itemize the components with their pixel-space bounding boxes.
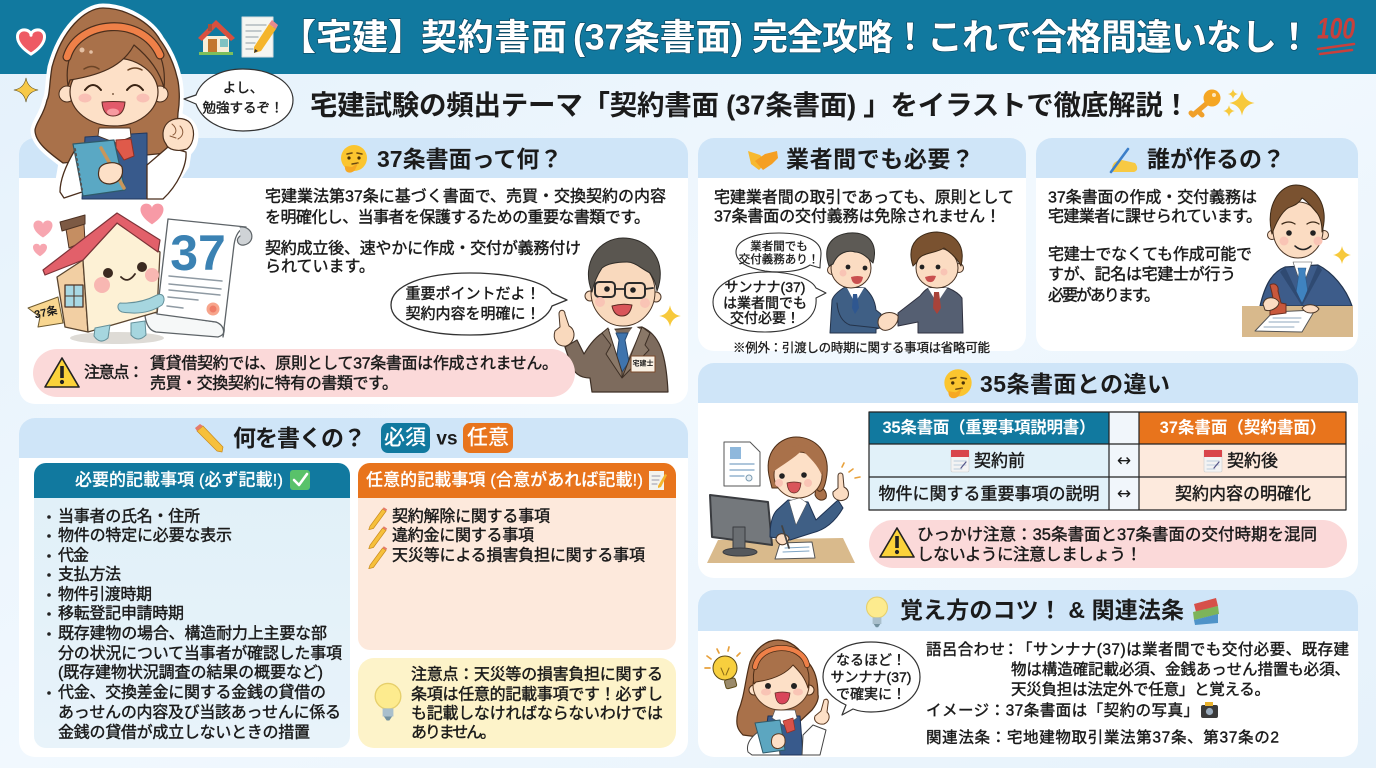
icon: thinking face (944, 369, 972, 398)
panel: who makes it: すが、記名は宅建士が行う (1048, 266, 1236, 284)
house walls (57, 260, 88, 332)
icon: sparkle (14, 78, 38, 102)
icon: bulb (375, 683, 401, 721)
text block: mnemonic: ： (1003, 642, 1019, 658)
list: optional: 契約解除に関する事項 (392, 508, 550, 526)
callout: caution (33, 349, 575, 397)
heading: difference: 35条書面との違い (980, 371, 1170, 397)
speech bubble: I see: サンナナ(37) (831, 669, 911, 685)
icon: thinking face (341, 145, 367, 173)
right sleeve and hand (802, 725, 826, 755)
text block: mnemonic (926, 640, 1350, 746)
comparison table: 35条書面（重要事項説明書） (882, 417, 1096, 437)
footnote: exception: ※例外：引渡しの時期に関する事項は省略可能 (733, 340, 990, 355)
header banner (0, 0, 1376, 74)
text block: mnemonic: 天災負担は法定外で任意」と覚える。 (1011, 680, 1270, 698)
column: mandatory items (34, 463, 350, 748)
icon: memo (649, 471, 667, 490)
speech bubble: I see: なるほど！ (836, 652, 906, 668)
list: optional: 天災等による損害負担に関する事項 (392, 546, 645, 564)
speech bubble: top: 業者間でも (750, 240, 808, 253)
icon: bulb (867, 597, 887, 627)
callout: trap warning (869, 520, 1347, 568)
title (280, 16, 1312, 58)
white sticker outline (35, 8, 194, 199)
list: mandatory: 金銭の貸借が成立しないときの措置 (58, 724, 310, 742)
text block: mnemonic: イメージ：37条書面は「契約の写真」 (926, 702, 1199, 720)
icon: handshake (748, 151, 778, 170)
panel: who makes it: 宅建士でなくても作成可能で (1048, 246, 1252, 264)
speech bubble: top (736, 233, 821, 272)
callout: caution: 賃貸借契約では、原則として37条書面は作成されません。 (150, 354, 558, 372)
face (749, 685, 759, 695)
list: mandatory: 移転登記申請時期 (58, 604, 184, 622)
column: optional items: 任意的記載事項 (合意があれば記載!) (366, 470, 643, 490)
text block: definition: られています。 (265, 258, 375, 276)
list: mandatory: 支払方法 (58, 566, 121, 584)
comparison table: 契約前 (974, 452, 1025, 470)
hair (737, 640, 818, 740)
callout: trap warning: しないように注意しましょう！ (917, 545, 1142, 564)
panel: business to business: 37条書面の交付義務は免除されません！ (714, 208, 1001, 226)
icon: heart (17, 30, 45, 54)
title: 契約書面 (421, 16, 567, 58)
speech bubble: bottom (713, 272, 826, 332)
callout: caution: 売買・交換契約に特有の書類です。 (150, 374, 398, 392)
list: mandatory: (既存建物状況調査の結果の概要など) (58, 664, 323, 682)
icon: sparkles (1223, 89, 1255, 117)
heading: b2b: 業者間でも必要？ (786, 146, 974, 172)
right businessman (898, 288, 963, 333)
scroll document: 37 (170, 225, 226, 281)
list: optional (369, 507, 645, 569)
character: teacher with glasses: 宅建士 (632, 358, 654, 368)
title: (37条書面) (573, 16, 743, 58)
panel: who makes it: 宅建業者に課せられています。 (1048, 208, 1262, 226)
column: mandatory items: 必要的記載事項 (必ず記載!) (75, 470, 283, 490)
icon: pencil (195, 424, 223, 452)
list: mandatory: あっせんの内容及び当該あっせんに係る (58, 704, 341, 722)
icon: 100: 100 (1317, 12, 1355, 46)
badge: required (381, 423, 430, 453)
illustration: house with scroll: 37条 (33, 303, 59, 321)
heading: what to write: 何を書くの？ (233, 425, 366, 451)
list: mandatory: 物件の特定に必要な表示 (58, 526, 232, 544)
comparison table: 契約後 (1227, 452, 1278, 470)
heading: tips: 覚え方のコツ！ & 関連法条 (900, 597, 1184, 623)
text block: mnemonic: 関連法条：宅地建物取引業法第37条、第37条の2 (926, 728, 1279, 746)
face details (85, 85, 143, 90)
title: 完全攻略！これで合格間違いなし！ (752, 16, 1312, 58)
right sleeve and fist (147, 147, 186, 199)
icon: camera (1201, 702, 1218, 718)
list: optional: 違約金に関する事項 (392, 526, 534, 544)
speech bubble: let's study (184, 69, 293, 131)
callout: note (358, 658, 676, 748)
speech bubble: teacher (391, 273, 567, 335)
column: optional items (358, 463, 676, 650)
heading: what is it: 37条書面って何？ (377, 146, 562, 172)
list: mandatory: 既存建物の場合、構造耐力上主要な部 (58, 624, 327, 642)
character: teacher with glasses (554, 238, 681, 392)
text block: mnemonic: 物は構造確記載必須、金銭あっせん措置も必須、 (1011, 660, 1350, 678)
callout: note: 条項は任意的記載事項です！必ずし (411, 686, 663, 704)
left sleeve, notebook, hand (747, 732, 780, 755)
badge: optional: 任意 (467, 426, 509, 450)
bangs (67, 24, 164, 88)
badge: required: 必須 (384, 426, 426, 450)
panel: difference from article 35 (698, 363, 1358, 578)
label: vs: vs (436, 428, 458, 450)
comparison table: ↔ (1117, 451, 1131, 471)
heading: who: 誰が作るの？ (1147, 146, 1285, 172)
list: mandatory: 当事者の氏名・住所 (58, 508, 200, 526)
list: mandatory: 分の状況について当事者が確認した事項 (58, 644, 342, 662)
speech bubble: let's study: 勉強するぞ！ (202, 100, 284, 116)
left sleeve and notebook (60, 150, 101, 198)
speech bubble: teacher: 重要ポイントだよ！ (405, 286, 541, 302)
comparison table: ↔ (1117, 484, 1131, 504)
callout: note: ありません。 (411, 724, 496, 742)
panel: memory tips (698, 590, 1358, 757)
icon: house (198, 20, 235, 55)
vest (763, 716, 803, 755)
speech bubble: bottom: は業者間でも (723, 295, 807, 311)
label: caution: 注意点： (84, 364, 144, 382)
character: girl student with notebook (35, 8, 194, 199)
icon: check (290, 470, 310, 490)
subtitle: 宅建試験の頻出テーマ「契約書面 (37条書面) 」をイラストで徹底解説！ (310, 90, 1190, 120)
callout: note: も記載しなければならないわけでは (411, 704, 663, 722)
speech bubble: let's study: よし、 (223, 80, 263, 96)
badge: optional (463, 423, 513, 453)
list: mandatory: 物件引渡時期 (58, 586, 152, 604)
list: mandatory: 代金 (58, 546, 89, 564)
text block: b2b: 宅建業者間の取引であっても、原則として (714, 188, 1014, 206)
comparison table: 物件に関する重要事項の説明 (878, 484, 1100, 504)
vest (82, 133, 147, 199)
text block: definition: 契約成立後、速やかに作成・交付が義務付け (265, 240, 581, 258)
panel: what to write (19, 418, 688, 757)
icon: memo (242, 17, 278, 57)
list: mandatory (47, 508, 342, 742)
illustration: house with scroll (28, 204, 252, 344)
hair back (35, 8, 179, 163)
ears and face (59, 86, 75, 102)
icon: key (1191, 90, 1220, 115)
speech bubble: I see: で確実に！ (836, 686, 906, 702)
text block: definition: 宅建業法第37条に基づく書面で、売買・交換契約の内容 (265, 188, 666, 206)
comparison table: 37条書面（契約書面） (1160, 417, 1326, 437)
text block: definition: を明確化し、当事者を保護するための重要な書類です。 (265, 208, 650, 226)
left businessman (830, 287, 881, 333)
text block: definition (265, 188, 666, 276)
illustration: girl with bulb (705, 640, 829, 755)
chimney (66, 224, 85, 248)
comparison table (869, 412, 1346, 510)
icon: writing hand (1111, 149, 1137, 172)
speech bubble: bottom: 交付必要！ (730, 310, 800, 326)
callout: note: 注意点：天災等の損害負担に関する (411, 666, 663, 684)
text block: who: 37条書面の作成・交付義務は (1048, 188, 1257, 206)
scroll document (145, 219, 252, 337)
speech bubble: top: 交付義務あり！ (739, 252, 819, 266)
illustration: man stamping document (1242, 185, 1353, 337)
panel: who makes it (1036, 138, 1358, 351)
panel: 37条書面って何？ (19, 138, 688, 404)
handshake (878, 312, 898, 330)
icon: 100 (1317, 12, 1355, 54)
text block: mnemonic: 語呂合わせ (926, 640, 1005, 658)
icon: warning (45, 358, 79, 387)
panel: who makes it: 必要があります。 (1048, 286, 1160, 304)
title: 【宅建】 (280, 16, 424, 58)
text block: mnemonic: 「サンナナ(37)は業者間でも交付必要、既存建 (1017, 640, 1349, 658)
comparison table: 契約内容の明確化 (1175, 484, 1311, 504)
illustration: woman at desk (707, 437, 860, 563)
list: mandatory: 代金、交換差金に関する金銭の貸借の (58, 684, 326, 702)
speech bubble: bottom: サンナナ(37) (725, 279, 805, 295)
callout: trap warning: ひっかけ注意：35条書面と37条書面の交付時期を混同 (917, 525, 1317, 544)
illustration: businessmen shaking hands (827, 232, 964, 333)
speech bubble: teacher: 契約内容を明確に！ (405, 306, 541, 322)
icon: books (1193, 598, 1219, 625)
speech bubble: I see (823, 642, 920, 715)
panel: business to business (698, 138, 1026, 355)
